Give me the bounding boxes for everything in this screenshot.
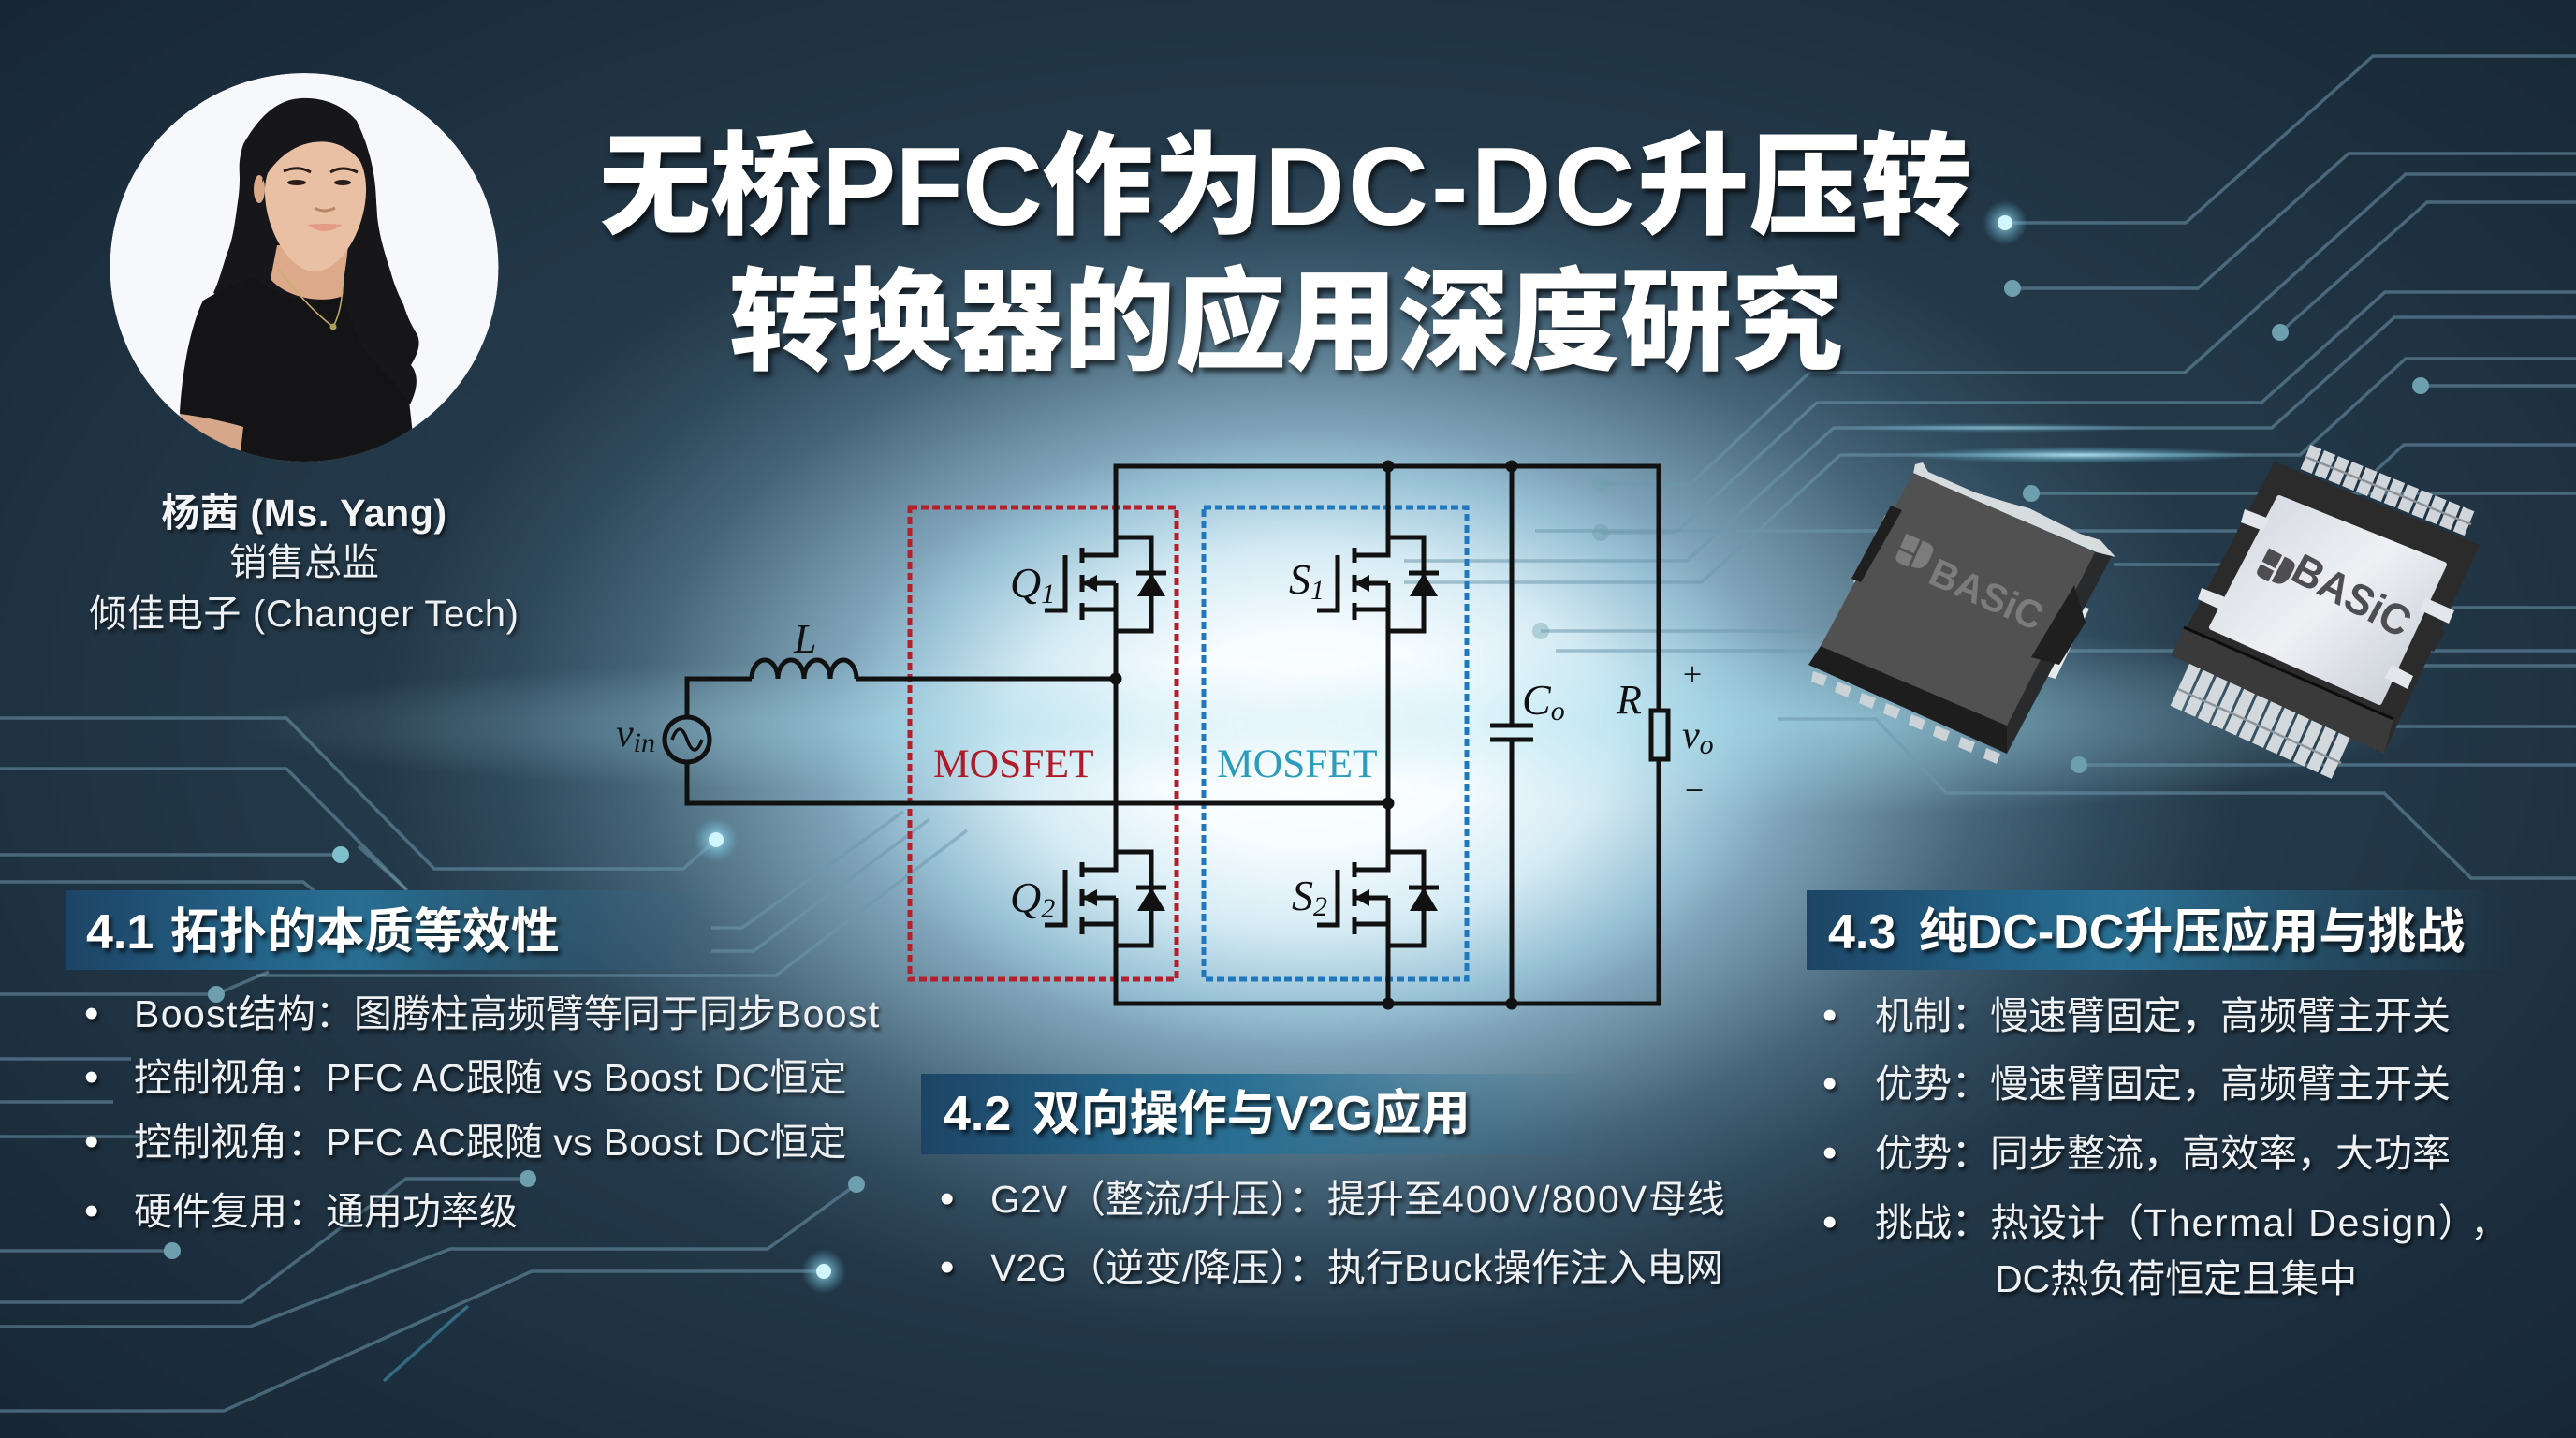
- bullet 1: 机制：慢速臂固定，高频臂主开关: [1875, 994, 2451, 1037]
- hairline: [262, 139, 361, 183]
- presenter name and role: [89, 492, 520, 638]
- bullet 2: V2G（逆变/降压）：执行Buck操作注入电网: [990, 1246, 1723, 1289]
- component labels: S: [1292, 872, 1313, 919]
- portrait photo of Ms. Yang: [110, 73, 498, 462]
- arm: [180, 414, 243, 451]
- junction dots: [1110, 461, 1518, 1009]
- component labels: C: [1522, 676, 1551, 724]
- presenter name: 杨茜 (Ms. Yang): [161, 492, 447, 535]
- back hair: [213, 98, 376, 309]
- presenter title: 销售总监: [229, 542, 379, 583]
- title line 1: 无桥PFC作为DC-DC升压转: [599, 125, 1971, 249]
- heading bar 4.2: [921, 1074, 1614, 1154]
- component labels: o: [1551, 696, 1565, 726]
- component labels: in: [634, 727, 655, 758]
- component labels: v: [1682, 714, 1700, 757]
- bullet 3: •: [84, 1119, 98, 1165]
- section 4.3: [1807, 890, 2537, 1302]
- circuit diagram: bridgeless PFC: +: [1683, 655, 1702, 693]
- bullet 4: •: [1822, 1199, 1837, 1245]
- component labels: [616, 555, 1714, 924]
- AC source: [665, 717, 710, 762]
- bullet list 4.1: [84, 990, 883, 1234]
- chip logo text dark: BASiC: [1923, 550, 2050, 638]
- MOSFET label red: MOSFET: [933, 741, 1094, 786]
- component labels: R: [1616, 677, 1642, 723]
- component labels: 2: [1313, 891, 1327, 922]
- bullet 2: •: [84, 1054, 98, 1100]
- bullet 4: [1825, 1196, 2518, 1305]
- component labels: 1: [1310, 575, 1325, 606]
- eyes, nose, mouth: [287, 180, 306, 185]
- MOSFET Q2: [1045, 852, 1166, 946]
- title: [599, 125, 1973, 385]
- resistor R: [1651, 711, 1668, 759]
- wiring: [687, 466, 1659, 1004]
- component labels: 2: [1041, 893, 1055, 924]
- bullet 1: •: [84, 990, 98, 1036]
- circuit diagram: bridgeless PFC: −: [1685, 771, 1704, 809]
- chip top side: [1808, 462, 2115, 764]
- bullet 1: •: [940, 1176, 954, 1222]
- bullet 2: •: [940, 1244, 954, 1290]
- bullet 1: •: [1822, 992, 1837, 1038]
- MOSFET dashed box blue: [1204, 507, 1467, 979]
- bullet list 4.3: [1807, 984, 2537, 1302]
- bullet list 4.2: [921, 1167, 1745, 1299]
- bullet 4: DC热负荷恒定且集中: [1995, 1257, 2357, 1300]
- bullet 2: 优势：慢速臂固定，高频臂主开关: [1875, 1063, 2451, 1106]
- MOSFET dashed box red: [910, 507, 1177, 979]
- bullet 3: •: [1822, 1130, 1837, 1176]
- chip bottom side: [2172, 457, 2480, 763]
- MOSFET Q1: [1045, 537, 1166, 631]
- component labels: 1: [1041, 579, 1055, 609]
- heading 4.1: 4.1 拓扑的本质等效性: [86, 905, 560, 960]
- shirt: [180, 294, 412, 462]
- bullet 4: 硬件复用：通用功率级: [134, 1190, 518, 1233]
- section 4.1: [66, 890, 883, 1234]
- bullet 4: 挑战：热设计（Thermal Design） ，: [1875, 1201, 2509, 1244]
- front hair strands on right shoulder: [344, 140, 419, 404]
- presenter company: 倾佳电子 (Changer Tech): [89, 594, 520, 635]
- bullet 1: Boost结构：图腾柱高频臂等同于同步Boost: [134, 992, 881, 1035]
- MOSFET S2: [1317, 852, 1439, 946]
- inductor L: [752, 660, 856, 679]
- component labels: S: [1289, 555, 1310, 603]
- ear: [254, 175, 265, 203]
- component labels: Q: [1010, 873, 1041, 921]
- heading bar 4.3: [1807, 890, 2509, 970]
- section 4.2: [921, 1074, 1745, 1299]
- component labels: v: [616, 712, 634, 756]
- neck: [271, 245, 348, 300]
- component labels: Q: [1010, 559, 1041, 607]
- face: [265, 139, 366, 271]
- component labels: L: [793, 616, 816, 662]
- component labels: o: [1700, 729, 1714, 760]
- chip logo text light: BASiC: [2284, 544, 2420, 647]
- bullet 3: 控制视角：PFC AC跟随 vs Boost DC恒定: [134, 1121, 846, 1164]
- bullet 4: •: [84, 1188, 98, 1234]
- bullet 2: 控制视角：PFC AC跟随 vs Boost DC恒定: [134, 1056, 846, 1099]
- heading 4.3: 4.3 纯DC-DC升压应用与挑战: [1828, 905, 2465, 960]
- necklace: [279, 270, 343, 327]
- heading 4.2: 4.2 双向操作与V2G应用: [944, 1087, 1471, 1141]
- heading bar 4.1: [66, 890, 721, 970]
- MOSFET S1: [1317, 537, 1439, 631]
- MOSFET label blue: MOSFET: [1217, 741, 1378, 786]
- bullet 1: G2V（整流/升压）：提升至400V/800V母线: [990, 1178, 1725, 1221]
- title line 2: 转换器的应用深度研究: [729, 260, 1843, 385]
- bullet 3: 优势：同步整流，高效率，大功率: [1875, 1132, 2451, 1175]
- bullet 2: •: [1822, 1061, 1837, 1107]
